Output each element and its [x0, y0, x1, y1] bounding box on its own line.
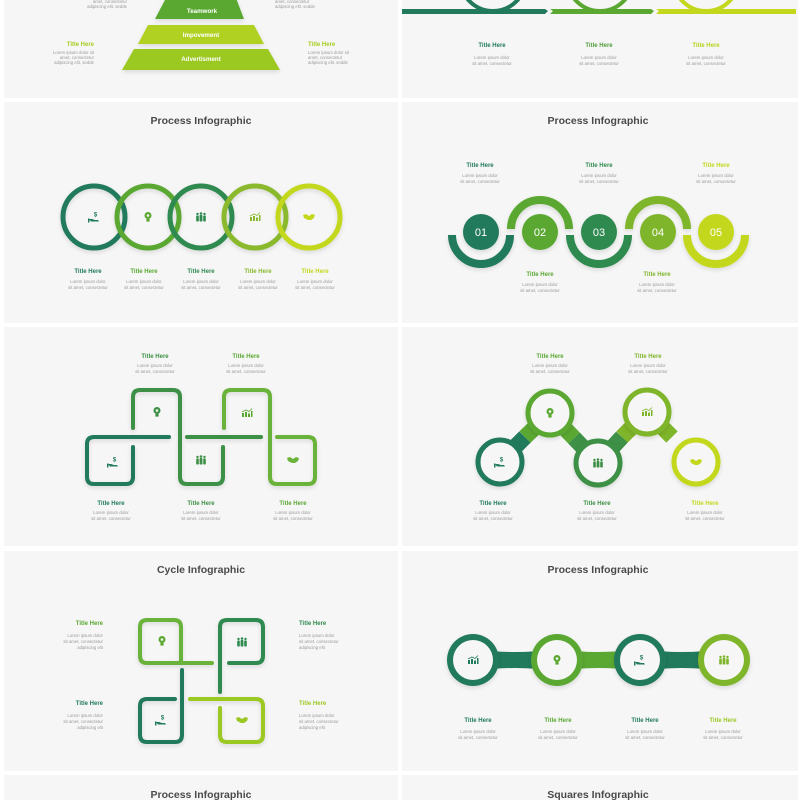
panel: square zigzag (row 3 left)	[87, 354, 315, 521]
labels: Title Here	[634, 354, 662, 360]
labels: sit amet, consectetur	[460, 179, 500, 184]
panel: arc bars (top-right): Title Here	[692, 43, 720, 49]
labels: Lorem ipsum dolor	[183, 510, 219, 515]
pyramid layers	[122, 0, 280, 70]
labels	[460, 163, 736, 293]
labels: sit amet, consectetur	[299, 639, 339, 644]
labels	[68, 269, 335, 290]
heading: Process Infographic	[548, 564, 649, 576]
labels: Lorem ipsum dolor	[297, 279, 333, 284]
panel: arc bars (top-right): sit amet, consectetur	[472, 61, 512, 66]
panel: arc bars (top-right): Lorem ipsum dolor	[688, 55, 724, 60]
labels: Title Here	[691, 501, 719, 507]
labels: sit amet, consectetur	[63, 639, 104, 644]
labels: Lorem ipsum dolor	[299, 713, 335, 718]
labels: sit amet, consectetur	[91, 516, 131, 521]
labels: Lorem ipsum dolor	[70, 279, 106, 284]
side text blocks	[53, 0, 350, 65]
rings	[478, 390, 718, 485]
labels: Title Here	[709, 718, 737, 724]
panel: arc bars (top-right): Title Here	[478, 43, 506, 49]
labels: sit amet, consectetur	[628, 369, 668, 374]
panel: pyramid (top-left)	[53, 0, 350, 70]
labels	[91, 354, 313, 521]
labels: sit amet, consectetur	[577, 516, 617, 521]
labels: Lorem ipsum dolor	[275, 510, 311, 515]
panel: arc bars (top-right): sit amet, consectetur	[579, 61, 619, 66]
panel: pyramid (top-left): Impovement	[183, 32, 219, 39]
rings	[63, 186, 340, 248]
labels: sit amet, consectetur	[538, 735, 578, 740]
labels: Lorem ipsum dolor	[581, 173, 617, 178]
labels: Lorem ipsum dolor	[67, 713, 104, 718]
labels: Lorem ipsum dolor	[698, 173, 734, 178]
labels: Lorem ipsum dolor	[540, 729, 576, 734]
labels: sit amet, consectetur	[124, 285, 164, 290]
heading: Cycle Infographic	[157, 564, 245, 576]
labels: sit amet, consectetur	[295, 285, 335, 290]
connectors	[500, 412, 672, 463]
side text blocks: adipiscing elit, sedde	[275, 4, 316, 9]
labels: Title Here	[301, 269, 329, 275]
labels: sit amet, consectetur	[181, 285, 221, 290]
labels: Lorem ipsum dolor	[137, 363, 173, 368]
labels: Title Here	[76, 621, 104, 627]
labels: Title Here	[544, 718, 572, 724]
panel: pyramid (top-left): Teamwork	[187, 8, 218, 15]
labels: adipiscing elit	[77, 645, 104, 650]
labels: adipiscing elit	[77, 725, 104, 730]
labels: Lorem ipsum dolor	[462, 173, 498, 178]
labels: sit amet, consectetur	[458, 735, 498, 740]
labels: Lorem ipsum dolor	[67, 633, 104, 638]
side text blocks: amet, consectetur	[308, 55, 343, 60]
cycle paths	[140, 620, 263, 742]
icons	[88, 212, 99, 222]
labels: Title Here	[187, 269, 215, 275]
panel: numbered wave (row 2 right): 02	[534, 227, 546, 239]
rings	[447, 634, 750, 686]
labels: Lorem ipsum dolor	[579, 510, 615, 515]
side text blocks: Title Here	[308, 42, 336, 48]
panel: ring chain (row 4 right)	[447, 564, 750, 740]
labels: Lorem ipsum dolor	[183, 279, 219, 284]
connectors	[473, 649, 724, 671]
labels: Lorem ipsum dolor	[630, 363, 666, 368]
heading: Process Infographic	[548, 115, 649, 127]
labels: sit amet, consectetur	[703, 735, 743, 740]
labels: Title Here	[76, 701, 104, 707]
panel: cycle (row 4 left)	[63, 564, 339, 742]
labels: Title Here	[299, 621, 327, 627]
side text blocks: adipiscing elit, sedde	[308, 60, 349, 65]
labels: sit amet, consectetur	[135, 369, 175, 374]
panel: numbered wave (row 2 right): 04	[652, 227, 664, 239]
icons	[468, 656, 478, 664]
side text blocks: Lorem ipsum dolor sit	[53, 50, 95, 55]
labels: Title Here	[130, 269, 158, 275]
labels: Title Here	[643, 272, 671, 278]
panel: numbered wave (row 2 right): 03	[593, 227, 605, 239]
panel: arc bars (top-right)	[402, 0, 796, 66]
zigzag path	[87, 390, 315, 484]
panel: numbered wave (row 2 right): 01	[475, 227, 487, 239]
labels: sit amet, consectetur	[181, 516, 221, 521]
labels: adipiscing elit	[299, 645, 326, 650]
panel: linked circles (row 3 right)	[473, 354, 725, 521]
panel: arc bars (top-right): Lorem ipsum dolor	[474, 55, 510, 60]
labels: Lorem ipsum dolor	[228, 363, 264, 368]
labels: Lorem ipsum dolor	[299, 633, 335, 638]
labels: sit amet, consectetur	[520, 288, 560, 293]
side text blocks: adipiscing elit, sedde	[54, 60, 95, 65]
labels: sit amet, consectetur	[530, 369, 570, 374]
labels: sit amet, consectetur	[473, 516, 513, 521]
labels: sit amet, consectetur	[637, 288, 677, 293]
panel: numbered wave (row 2 right): 05	[710, 227, 722, 239]
labels: sit amet, consectetur	[63, 719, 104, 724]
icons	[107, 458, 118, 468]
labels: Lorem ipsum dolor	[522, 282, 558, 287]
labels: Title Here	[479, 501, 507, 507]
labels: adipiscing elit	[299, 725, 326, 730]
labels: sit amet, consectetur	[226, 369, 266, 374]
labels: sit amet, consectetur	[68, 285, 108, 290]
arcs	[452, 200, 745, 264]
labels	[458, 718, 743, 740]
labels: sit amet, consectetur	[696, 179, 736, 184]
side text blocks: adipiscing elit, sedde	[87, 4, 128, 9]
labels: Title Here	[244, 269, 272, 275]
labels: Title Here	[141, 354, 169, 360]
labels: sit amet, consectetur	[273, 516, 313, 521]
panel: arc bars (top-right): sit amet, consectetur	[686, 61, 726, 66]
labels: Title Here	[279, 501, 307, 507]
labels: Title Here	[526, 272, 554, 278]
labels: Lorem ipsum dolor	[93, 510, 129, 515]
heading: Process Infographic	[151, 115, 252, 127]
labels: Lorem ipsum dolor	[240, 279, 276, 284]
labels: Title Here	[187, 501, 215, 507]
panel: arc bars (top-right): Lorem ipsum dolor	[581, 55, 617, 60]
labels	[473, 354, 725, 521]
panel: numbered wave (row 2 right)	[452, 115, 745, 293]
icons	[494, 458, 505, 468]
number circles	[463, 214, 734, 250]
side text blocks: amet, consectetur	[60, 55, 95, 60]
labels: Title Here	[702, 163, 730, 169]
side text blocks: Lorem ipsum dolor sit	[308, 50, 350, 55]
labels: Title Here	[583, 501, 611, 507]
labels: Title Here	[299, 701, 327, 707]
labels: Title Here	[585, 163, 613, 169]
panel: arc bars (top-right): Title Here	[585, 43, 613, 49]
labels: Title Here	[232, 354, 260, 360]
labels: Title Here	[74, 269, 102, 275]
labels: sit amet, consectetur	[299, 719, 339, 724]
labels: Title Here	[464, 718, 492, 724]
icons	[158, 636, 166, 646]
labels	[63, 621, 339, 730]
labels: sit amet, consectetur	[579, 179, 619, 184]
labels: Title Here	[536, 354, 564, 360]
labels: Lorem ipsum dolor	[532, 363, 568, 368]
labels: Title Here	[466, 163, 494, 169]
labels: Lorem ipsum dolor	[627, 729, 663, 734]
panel: pyramid (top-left): Advertisment	[181, 56, 221, 63]
side text blocks: Title Here	[67, 42, 95, 48]
labels: Lorem ipsum dolor	[126, 279, 162, 284]
labels: Title Here	[631, 718, 659, 724]
labels: Lorem ipsum dolor	[639, 282, 675, 287]
labels: Lorem ipsum dolor	[687, 510, 723, 515]
labels: Lorem ipsum dolor	[705, 729, 741, 734]
labels: sit amet, consectetur	[238, 285, 278, 290]
labels: Lorem ipsum dolor	[475, 510, 511, 515]
labels: sit amet, consectetur	[685, 516, 725, 521]
labels: Lorem ipsum dolor	[460, 729, 496, 734]
panel: process rings (row 2 left)	[63, 115, 340, 290]
labels: Title Here	[97, 501, 125, 507]
labels: sit amet, consectetur	[625, 735, 665, 740]
